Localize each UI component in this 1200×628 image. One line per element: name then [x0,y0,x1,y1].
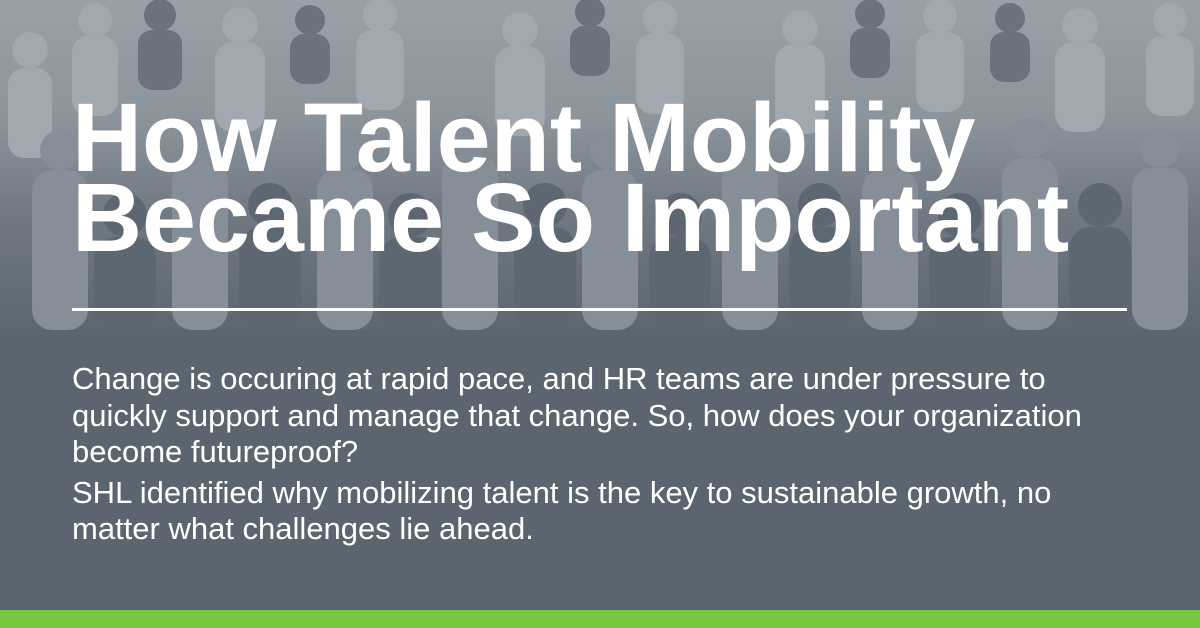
green footer bar [0,610,1200,628]
intro text: SHL identified why mobilizing talent is the key to sustainable growth, no [72,474,1051,510]
intro text [72,361,1082,546]
intro text: Change is occuring at rapid pace, and HR teams are under pressure to [72,361,1046,396]
intro text: matter what challenges lie ahead. [72,511,534,546]
divider line [72,308,1127,311]
title: Became So Important [72,163,1069,272]
intro text: become futureproof? [72,434,358,469]
background: crowd silhouettes [0,0,1200,330]
title [72,83,1069,272]
title: How Talent Mobility [72,83,976,192]
intro text: quickly support and manage that change. So, how does your organization [72,398,1082,432]
